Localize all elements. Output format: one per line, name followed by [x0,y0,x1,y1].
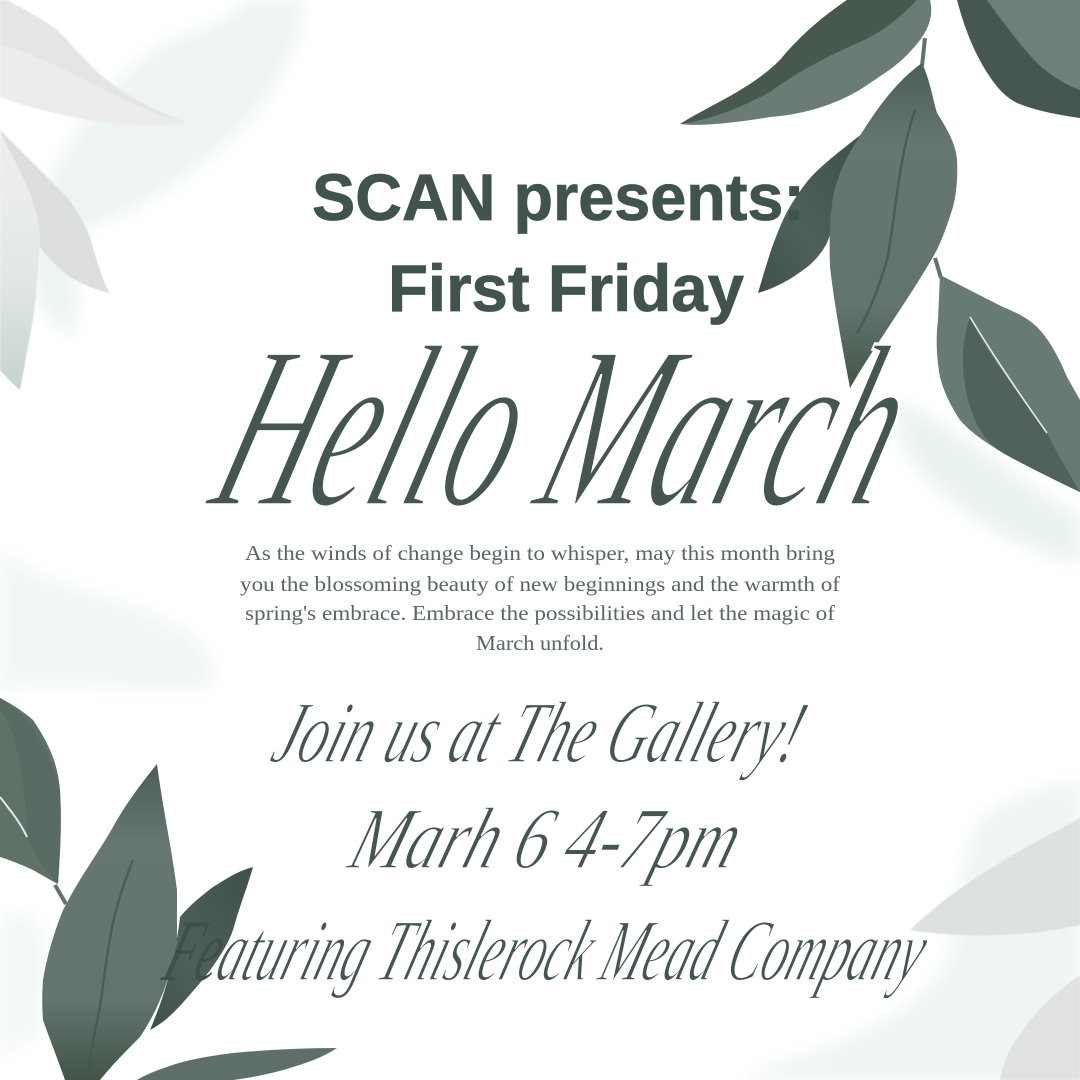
leaf: right lower dark [963,317,1080,492]
leaf: bottom right lower [1000,975,1080,1080]
leaf: top left middle [0,130,110,293]
leaf: dark right [150,867,253,1030]
leaf: dark behind [758,133,863,293]
paragraph line 3: spring's embrace. Embrace the possibilities and let the magic of [245,601,835,625]
leaf: top left upper fold [0,45,187,125]
faded leaves bottom right [910,818,1080,1080]
leaf: bottom [137,1048,337,1080]
paragraph line 2: you the blossoming beauty of new beginnings and the warmth of [240,572,840,596]
leaf: top horizontal [680,0,931,125]
leaf: right lower [937,275,1080,492]
leaf: bottom right upper [910,818,1080,935]
body paragraph [240,541,840,655]
leaf: top left upper [0,0,187,125]
date and time: Marh 6 4-7pm [337,790,755,887]
stem [922,38,941,278]
leaf branch bottom left [0,698,337,1080]
leaf: main large [830,63,957,388]
heading line 2: First Friday [388,251,744,325]
stem [55,885,66,904]
event details [153,684,941,999]
paragraph line 1: As the winds of change begin to whisper, may this month bring [245,541,836,565]
leaf: left edge highlight [0,797,27,837]
leaf: main vein [857,110,915,333]
leaf: top corner light inner [987,0,1080,90]
paragraph line 4: March unfold. [476,631,604,655]
faded leaves top left [0,0,187,390]
heading [312,160,805,325]
leaf: left edge dark [0,698,61,884]
leaf: right lower highlight [970,317,1047,433]
leaf: top corner [957,0,1080,118]
leaf: left edge [0,698,61,884]
leaf: main vein [87,860,133,1080]
leaf: top left lower [0,133,40,390]
leaf: main large [42,764,177,1080]
leaf: top horizontal dark band [680,0,917,124]
heading line 1: SCAN presents: [312,160,805,234]
leaf branch top right [680,0,1080,492]
